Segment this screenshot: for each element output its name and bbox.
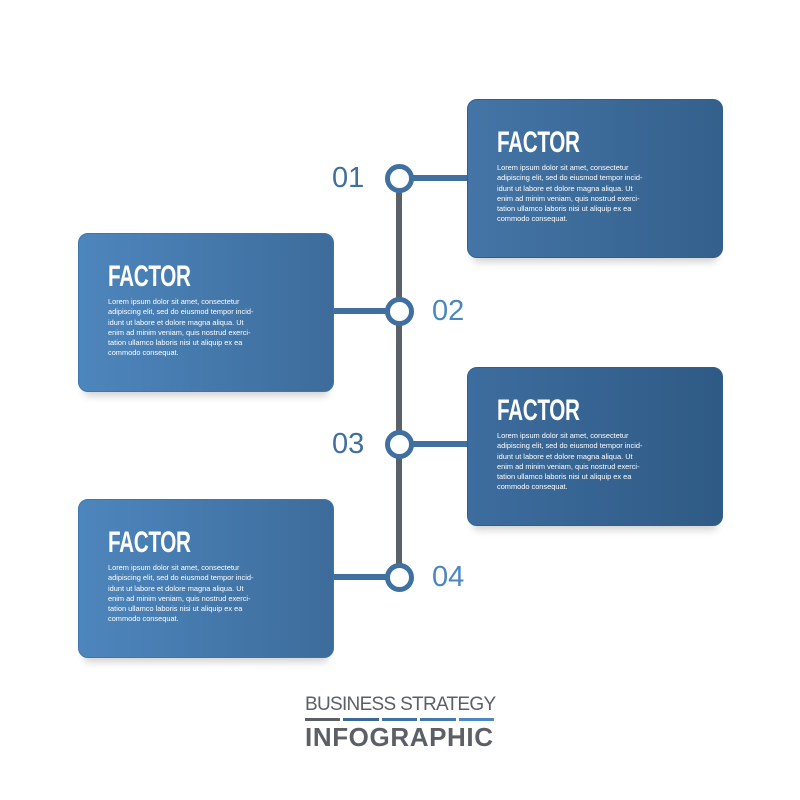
card 2: adipiscing elit, sed do eiusmod tempor incid- [108,307,253,316]
number 03: 03 [332,428,364,460]
card 4: adipiscing elit, sed do eiusmod tempor incid- [108,573,253,582]
card 2: FACTOR [108,260,191,293]
card 1: enim ad minim veniam, quis nostrud exerci- [497,194,640,203]
card 2: idunt ut labore et dolore magna aliqua. Ut [108,318,244,327]
circle 2 [385,297,414,326]
card 3 [467,367,723,526]
footer title: BUSINESS STRATEGY [305,694,495,715]
card 1 [467,99,723,258]
card 3: enim ad minim veniam, quis nostrud exerci- [497,462,640,471]
card 3: adipiscing elit, sed do eiusmod tempor incid- [497,441,642,450]
card 3: commodo consequat. [497,482,568,491]
number 01: 01 [332,162,364,194]
card 3: FACTOR [497,394,580,427]
card 1: Lorem ipsum dolor sit amet, consectetur [497,163,628,172]
card 2: enim ad minim veniam, quis nostrud exerci- [108,328,251,337]
connector 4 [330,574,390,580]
card 1: commodo consequat. [497,214,568,223]
circle 3 [385,430,414,459]
card 4 [78,499,334,658]
card 4: commodo consequat. [108,614,179,623]
connector 3 [410,441,470,447]
circle 4 [385,563,414,592]
card 4: FACTOR [108,526,191,559]
card 2: commodo consequat. [108,348,179,357]
number 02: 02 [432,295,464,327]
card 4: enim ad minim veniam, quis nostrud exerci- [108,594,251,603]
connector 2 [330,308,390,314]
card 3: idunt ut labore et dolore magna aliqua. Ut [497,452,633,461]
card 4: idunt ut labore et dolore magna aliqua. Ut [108,584,244,593]
card 1: tation ullamco laboris nisi ut aliquip ex ea [497,204,631,213]
card 4: tation ullamco laboris nisi ut aliquip ex ea [108,604,242,613]
card 3: Lorem ipsum dolor sit amet, consectetur [497,431,628,440]
card 4: Lorem ipsum dolor sit amet, consectetur [108,563,239,572]
circle 1 [385,164,414,193]
number 04: 04 [432,561,464,593]
vertical timeline line [396,178,402,578]
card 1: idunt ut labore et dolore magna aliqua. Ut [497,184,633,193]
footer title: INFOGRAPHIC [305,722,494,752]
connector 1 [410,175,470,181]
card 2: tation ullamco laboris nisi ut aliquip ex ea [108,338,242,347]
card 2: Lorem ipsum dolor sit amet, consectetur [108,297,239,306]
footer title [305,694,496,752]
card 1: FACTOR [497,126,580,159]
card 3: tation ullamco laboris nisi ut aliquip ex ea [497,472,631,481]
card 2 [78,233,334,392]
card 1: adipiscing elit, sed do eiusmod tempor incid- [497,173,642,182]
